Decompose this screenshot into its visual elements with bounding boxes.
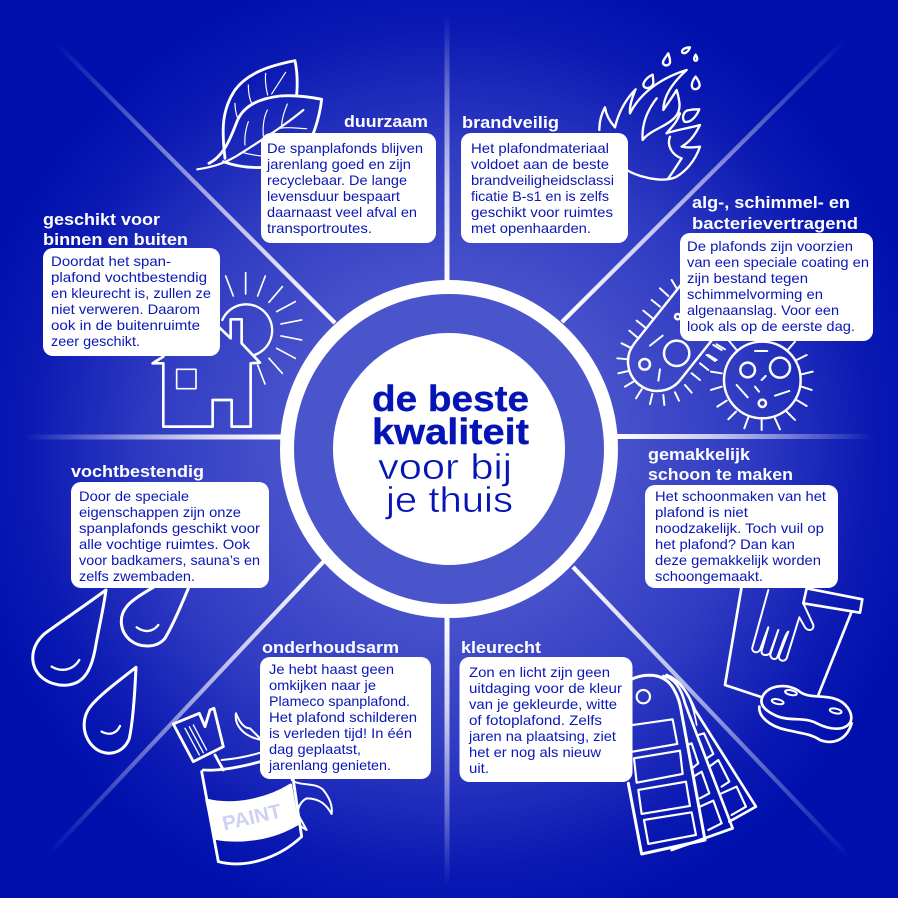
body text: zijn bestand tegen: [687, 270, 808, 286]
text box: [260, 657, 431, 779]
text box: [645, 485, 838, 588]
center circle: [287, 287, 611, 611]
icon: bacteria: [616, 260, 813, 430]
panel: onderhoudsarm: [173, 638, 431, 864]
heading: onderhoudsarm: [262, 638, 399, 657]
heading: brandveilig: [462, 113, 559, 132]
body text: plafond is niet: [655, 504, 748, 520]
body text: het plafond? Dan kan: [655, 536, 795, 552]
body text: voldoet aan de beste: [471, 156, 609, 172]
text box: [680, 233, 873, 341]
body text: Doordat het span-: [51, 253, 171, 269]
heading: geschikt voor: [43, 210, 160, 229]
body text: Door de speciale: [79, 488, 189, 504]
body text: [79, 488, 260, 584]
body text: De spanplafonds blijven: [267, 140, 423, 156]
body text: look als op de eerste dag.: [687, 318, 855, 334]
heading: binnen en buiten: [43, 230, 188, 249]
heading: vochtbestendig: [71, 462, 204, 481]
text box: [43, 248, 220, 356]
body text: geschikt voor ruimtes: [471, 204, 613, 220]
text box: [71, 482, 269, 588]
body text: jaren na plaatsing, ziet: [468, 728, 616, 744]
body text: zeer geschikt.: [51, 333, 140, 349]
body text: of fotoplafond. Zelfs: [469, 712, 602, 728]
body text: Het plafondmateriaal: [471, 140, 609, 156]
body text: schoongemaakt.: [655, 568, 763, 584]
body text: noodzakelijk. Toch vuil op: [655, 520, 824, 536]
panel: brandveilig: [461, 47, 700, 243]
heading: alg-, schimmel- en: [692, 193, 850, 212]
body text: Het schoonmaken van het: [655, 488, 826, 504]
body text: Je hebt haast geen: [269, 661, 394, 677]
heading: schoon te maken: [648, 465, 793, 484]
body text: [687, 238, 869, 334]
body text: [471, 140, 614, 236]
body text: De plafonds zijn voorzien: [687, 238, 853, 254]
body text: ook in de buitenruimte: [51, 317, 200, 333]
center title: de beste: [372, 378, 529, 419]
body text: dag geplaatst,: [269, 741, 361, 757]
body text: jarenlang goed en zijn: [266, 156, 411, 172]
body text: voor badkamers, sauna’s en: [79, 552, 260, 568]
body text: het er nog als nieuw: [469, 744, 602, 760]
icon: flame: [599, 47, 700, 180]
center title: je thuis: [385, 479, 513, 520]
center title: [372, 378, 529, 520]
panel: geschikt voor binnen en buiten: [43, 210, 302, 427]
panel: duurzaam: [197, 61, 436, 243]
icon: bucket, glove and sponge: [725, 587, 862, 742]
body text: levensduur bespaart: [267, 188, 400, 204]
body text: zelfs zwembaden.: [79, 568, 195, 584]
body text: jarenlang genieten.: [268, 757, 391, 773]
body text: met openhaarden.: [471, 220, 591, 236]
icon: colour swatches: [628, 675, 756, 854]
body text: is verleden tijd! In één: [269, 725, 412, 741]
body text: transportroutes.: [267, 220, 372, 236]
icon: house and sun: [153, 273, 302, 427]
text box: [261, 133, 436, 243]
icon: paint can and brush: [173, 708, 332, 864]
body text: brandveiligheidsclassi: [471, 172, 614, 188]
body text: alle vochtige ruimtes. Ook: [79, 536, 251, 552]
body text: en kleurecht is, zullen ze: [51, 285, 211, 301]
center title: voor bij: [378, 446, 512, 487]
body text: schimmelvorming en: [687, 286, 823, 302]
body text: deze gemakkelijk worden: [655, 552, 821, 568]
text box: [460, 657, 632, 782]
body text: Plameco spanplafond.: [269, 693, 410, 709]
heading: duurzaam: [344, 112, 428, 131]
heading: gemakkelijk: [648, 445, 751, 464]
panel: alg-, schimmel- en bacterievertragend: [616, 193, 873, 430]
body text: omkijken naar je: [269, 677, 376, 693]
panel: kleurecht: [460, 638, 756, 854]
heading: bacterievertragend: [692, 214, 858, 233]
body text: Het plafond schilderen: [269, 709, 417, 725]
body text: [266, 140, 423, 236]
panel: gemakkelijk schoon te maken: [645, 445, 862, 742]
body text: uitdaging voor de kleur: [469, 680, 622, 696]
body text: plafond vochtbestendig: [51, 269, 207, 285]
body text: recyclebaar. De lange: [267, 172, 407, 188]
body text: eigenschappen zijn onze: [79, 504, 241, 520]
icon: leaves: [197, 61, 322, 169]
body text: uit.: [469, 760, 489, 776]
body text: [268, 661, 417, 773]
heading: [692, 193, 858, 233]
body text: [655, 488, 826, 584]
body text: Zon en licht zijn geen: [469, 664, 610, 680]
text box: [461, 133, 628, 243]
body text: algenaanslag. Voor een: [687, 302, 839, 318]
heading: [43, 210, 188, 249]
body text: daarnaast veel afval en: [267, 204, 417, 220]
heading: kleurecht: [461, 638, 541, 657]
label text: paint: PAINT: [220, 800, 284, 835]
body text: [51, 253, 211, 349]
body text: spanplafonds geschikt voor: [79, 520, 260, 536]
body text: niet verweren. Daarom: [51, 301, 200, 317]
body text: van een speciale coating en: [687, 254, 869, 270]
body text: van je gekleurde, witte: [469, 696, 617, 712]
center title: kwaliteit: [372, 411, 529, 452]
panel: vochtbestendig: [33, 462, 269, 753]
body text: [468, 664, 622, 776]
icon: water drops: [33, 587, 188, 753]
heading: [648, 445, 793, 484]
body text: ficatie B-s1 en is zelfs: [471, 188, 609, 204]
